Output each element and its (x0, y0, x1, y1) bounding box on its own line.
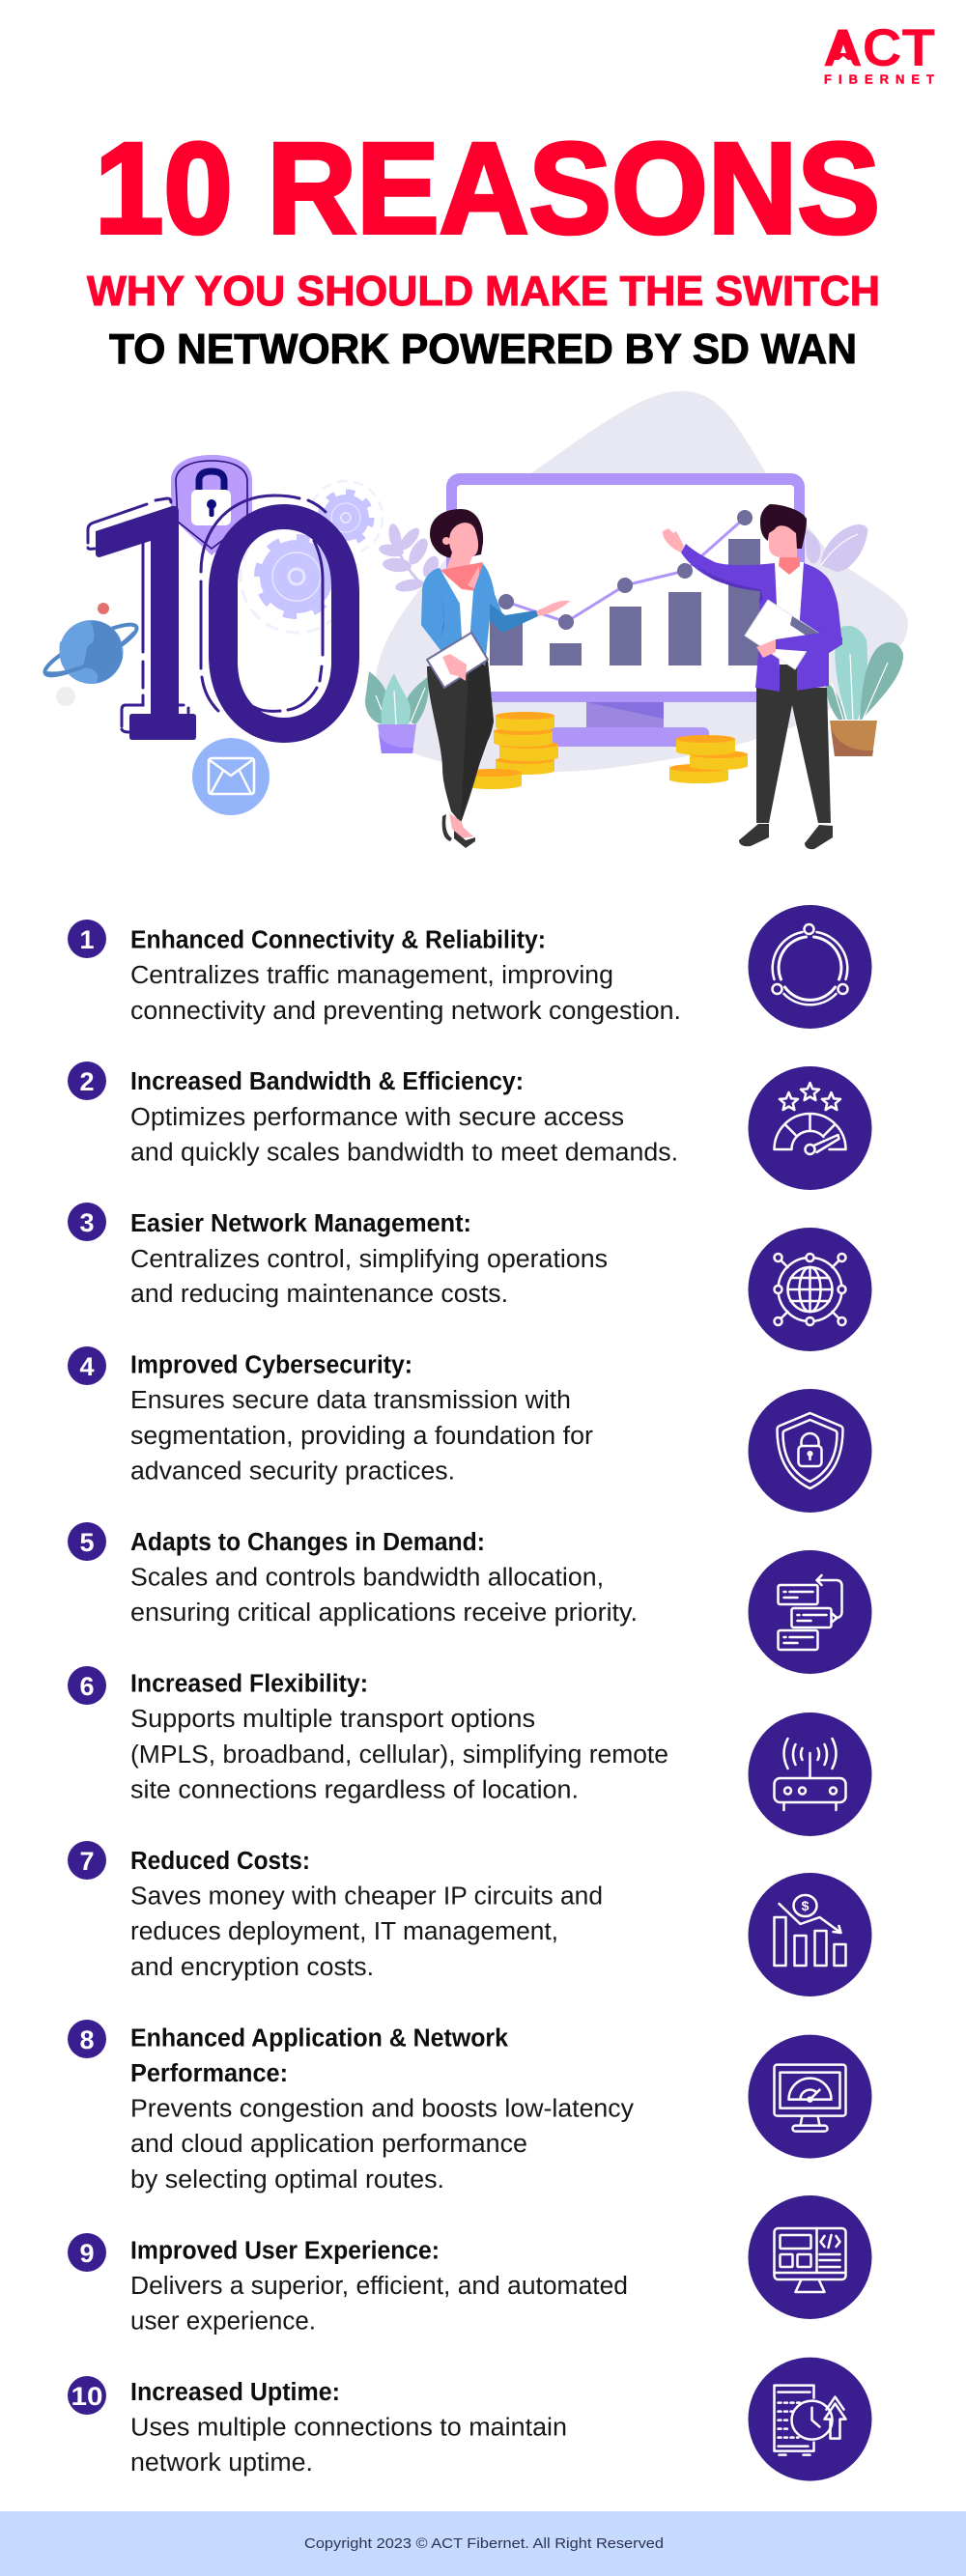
body text 9: user experience. (130, 2308, 316, 2335)
number badge 10: 10 (71, 2382, 102, 2411)
body text 7: Saves money with cheaper IP circuits and (130, 1883, 603, 1911)
heading 8 (130, 2024, 509, 2087)
icon: connectivity ring (748, 905, 871, 1029)
logo: ACT Fibernet: ACT (823, 17, 935, 77)
icon: purple leaves behind man (805, 524, 867, 572)
heading 9: Improved User Experience: (130, 2237, 440, 2264)
body text 9 (130, 2273, 628, 2335)
heading 8: Performance: (130, 2060, 288, 2087)
number badge 9: 9 (79, 2239, 95, 2268)
logo: ACT Fibernet: FIBERNET (824, 71, 934, 87)
number badge 5: 5 (79, 1528, 95, 1557)
icon: falling cost chart (748, 1873, 871, 1996)
number badge 6: 6 (79, 1672, 95, 1701)
body text 3: Centralizes control, simplifying operations (130, 1246, 608, 1273)
heading 2: Increased Bandwidth & Efficiency: (130, 1068, 524, 1095)
heading 1: Enhanced Connectivity & Reliability: (130, 927, 546, 954)
heading 5: Adapts to Changes in Demand: (130, 1529, 485, 1556)
icon: big gear (241, 521, 353, 633)
heading 10: Increased Uptime: (130, 2379, 340, 2406)
number badge 1: 1 (79, 925, 95, 954)
subtitle line 2: TO NETWORK POWERED BY SD WAN (109, 326, 857, 373)
icon: ringed planet (40, 616, 142, 684)
body text 7: and encryption costs. (130, 1954, 374, 1981)
bar and line chart on monitor (490, 510, 760, 665)
icon: security shield with lock (171, 455, 252, 555)
icon: monitor with gauge (748, 2035, 871, 2159)
number badge 2: 2 (79, 1067, 95, 1096)
reason 10 (68, 2358, 871, 2481)
number badge 8 (68, 2020, 106, 2058)
copyright text: Copyright 2023 © ACT Fibernet. All Right Reserved (304, 2535, 664, 2552)
number badge 3 (68, 1203, 106, 1241)
body text 5 (130, 1565, 638, 1627)
number badge 4: 4 (79, 1352, 95, 1381)
big numeral 1 (88, 498, 196, 740)
reason 1 (68, 905, 871, 1029)
number badge 3: 3 (79, 1208, 95, 1237)
number badge 7 (68, 1841, 106, 1880)
body text 8: by selecting optimal routes. (130, 2166, 444, 2194)
body text 3 (130, 1246, 608, 1308)
subtitle line 1: WHY YOU SHOULD MAKE THE SWITCH (87, 269, 880, 315)
heading 8: Enhanced Application & Network (130, 2024, 509, 2052)
woman presenter (421, 509, 570, 848)
number badge 9 (68, 2233, 106, 2272)
body text 1: Centralizes traffic management, improving (130, 962, 613, 989)
body text 10: Uses multiple connections to maintain (130, 2415, 567, 2442)
icon: code dashboard monitor (748, 2195, 871, 2319)
body text 8 (130, 2096, 634, 2194)
number badge 1 (68, 920, 106, 958)
body text 8: Prevents congestion and boosts low-latency (130, 2096, 634, 2123)
heading 4: Improved Cybersecurity: (130, 1352, 412, 1379)
footer bar (0, 2511, 966, 2576)
body text 9: Delivers a superior, efficient, and automated (130, 2273, 628, 2300)
number badge 5 (68, 1522, 106, 1561)
background blob (375, 391, 908, 772)
number badge 8: 8 (79, 2025, 95, 2054)
reason 4 (68, 1346, 871, 1513)
monitor (446, 473, 805, 747)
icon: envelope badge (192, 738, 270, 815)
heading 7: Reduced Costs: (130, 1848, 310, 1875)
icon: network globe (748, 1228, 871, 1351)
reason 5 (68, 1522, 871, 1674)
title: 10 REASONS (95, 117, 880, 261)
grey dot (56, 687, 75, 706)
icon: small gear (309, 481, 383, 554)
body text 7 (130, 1883, 603, 1981)
big numeral 0 (201, 495, 359, 743)
heading 6: Increased Flexibility: (130, 1671, 368, 1698)
number badge 10 (68, 2376, 106, 2415)
heading 3: Easier Network Management: (130, 1210, 471, 1237)
number badge 2 (68, 1062, 106, 1100)
reason 2 (68, 1062, 871, 1190)
reason 3 (68, 1203, 871, 1351)
reason 9 (68, 2195, 871, 2335)
number badge 4 (68, 1346, 106, 1385)
gold coin stacks (464, 712, 748, 789)
body text 6 (130, 1706, 668, 1804)
potted plant left (365, 671, 429, 753)
icon: message flow (748, 1550, 871, 1674)
reason 7 (68, 1841, 871, 1996)
body text 7: reduces deployment, IT management, (130, 1918, 558, 1945)
reason 8 (68, 2020, 871, 2194)
icon: falling cost chart: $ (802, 1898, 810, 1913)
icon: server clock uptime (748, 2358, 871, 2481)
body text 4 (130, 1387, 594, 1486)
body text 6: Supports multiple transport options (130, 1706, 535, 1733)
potted plant right (826, 626, 903, 756)
body text 4: segmentation, providing a foundation for (130, 1423, 594, 1450)
body text 6: (MPLS, broadband, cellular), simplifying remote (130, 1741, 668, 1769)
red dot (98, 603, 109, 614)
reason 6 (68, 1666, 871, 1836)
body text 3: and reducing maintenance costs. (130, 1281, 508, 1308)
icon: wifi router (748, 1713, 871, 1836)
body text 5: ensuring critical applications receive priority. (130, 1599, 638, 1627)
body text 10 (130, 2415, 567, 2477)
hero illustration (40, 391, 908, 849)
body text 2: Optimizes performance with secure access (130, 1104, 624, 1131)
body text 5: Scales and controls bandwidth allocation, (130, 1565, 604, 1592)
man presenter (663, 504, 842, 849)
body text 8: and cloud application performance (130, 2131, 527, 2158)
icon: speed gauge with stars (748, 1066, 871, 1190)
body text 10: network uptime. (130, 2449, 313, 2477)
body text 2 (130, 1104, 678, 1167)
body text 2: and quickly scales bandwidth to meet demands. (130, 1140, 678, 1167)
number badge 6 (68, 1666, 106, 1705)
number badge 7: 7 (79, 1847, 95, 1876)
body text 4: advanced security practices. (130, 1458, 455, 1486)
body text 4: Ensures secure data transmission with (130, 1387, 571, 1414)
body text 6: site connections regardless of location. (130, 1777, 579, 1804)
body text 1 (130, 962, 681, 1025)
body text 1: connectivity and preventing network congestion. (130, 998, 681, 1025)
icon: purple sprig (378, 523, 441, 594)
icon: shield lock (748, 1389, 871, 1513)
